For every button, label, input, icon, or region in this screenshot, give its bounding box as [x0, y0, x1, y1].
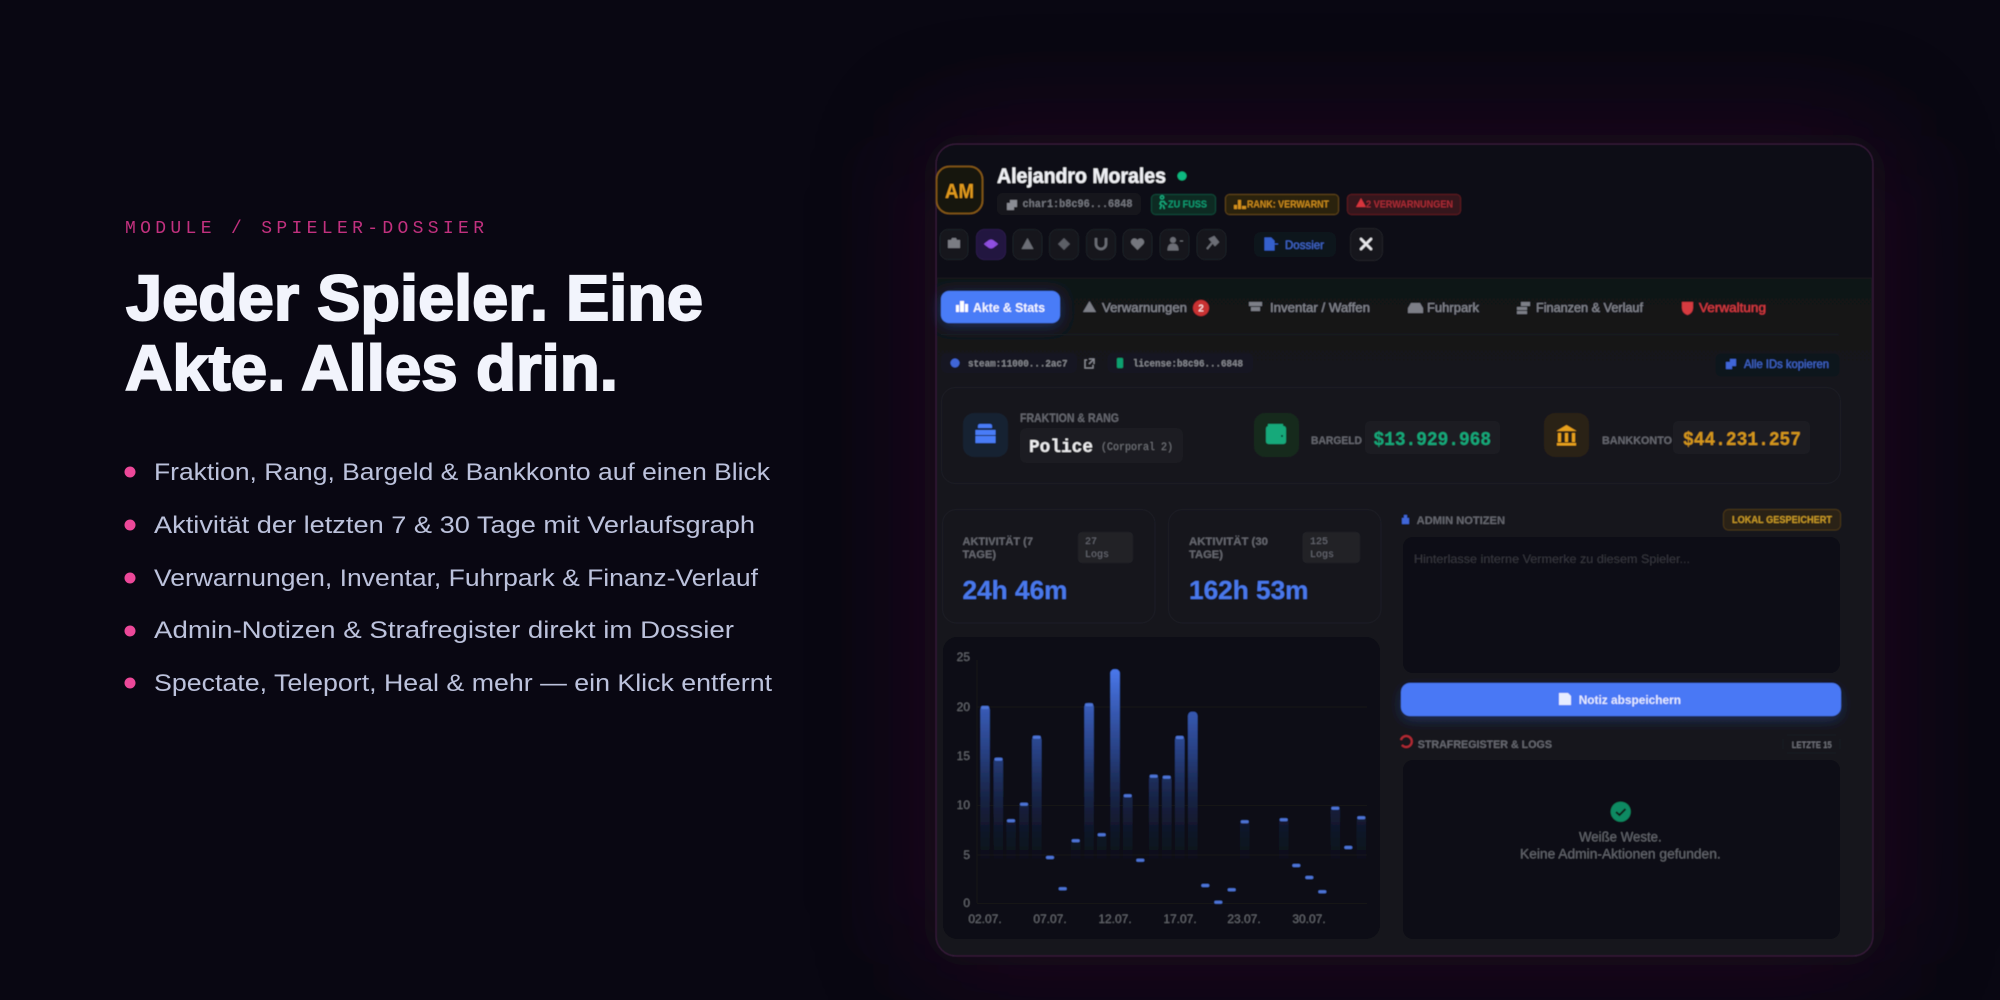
- steam id pill: steam:11000...2ac7: [968, 360, 1068, 370]
- y axis labels: 25: [957, 650, 970, 664]
- bank account: $44.231.257: [1683, 429, 1801, 451]
- activity card 30 days: TAGE): [1189, 549, 1223, 561]
- panel glow: [925, 135, 1885, 965]
- penalty log heading: [1401, 736, 1552, 751]
- x axis labels: 23.07.: [1227, 912, 1261, 926]
- bars: [980, 669, 1366, 903]
- activity card 30 days: Logs: [1310, 550, 1334, 561]
- y axis labels: 10: [957, 798, 970, 812]
- bar caps: [981, 703, 1365, 904]
- activity card 30 days: AKTIVITÄT (30: [1189, 535, 1268, 548]
- last 15 badge: LETZTE 15: [1792, 740, 1832, 750]
- penalty log heading: STRAFREGISTER & LOGS: [1418, 739, 1552, 751]
- tab: verwarnungen: Verwarnungen: [1102, 300, 1187, 315]
- bullet 4: Admin-Notizen & Strafregister direkt im Dossier: [154, 617, 734, 644]
- bullet 3: Verwarnungen, Inventar, Fuhrpark & Finanz-Verlauf: [154, 565, 758, 592]
- copy all ids button: [1715, 353, 1840, 377]
- y axis labels: 20: [957, 700, 970, 714]
- admin notes heading: ADMIN NOTIZEN: [1417, 515, 1505, 527]
- cash: [1311, 421, 1500, 454]
- tab: akte und stats (active): [941, 291, 1060, 325]
- icon: bank: [1544, 413, 1589, 457]
- badge: rank: [1226, 194, 1338, 214]
- tab: akte und stats (active): Akte & Stats: [973, 300, 1045, 315]
- close button: [1350, 228, 1382, 260]
- badge: warnings: 2 VERWARNUNGEN: [1366, 198, 1453, 210]
- saved locally badge: [1724, 510, 1840, 530]
- tab: verwarnungen: [1083, 300, 1209, 316]
- tab: fuhrpark: Fuhrpark: [1427, 300, 1479, 315]
- character id pill: char1:b8c96...6848: [1022, 199, 1133, 211]
- icon: check: [1611, 802, 1631, 822]
- x axis labels: 02.07.: [968, 912, 1002, 926]
- bank account: [1602, 421, 1810, 454]
- avatar: [936, 166, 982, 214]
- saved locally badge: LOKAL GESPEICHERT: [1732, 515, 1832, 526]
- character id pill: [997, 193, 1141, 215]
- bank account: BANKKONTO: [1602, 435, 1672, 447]
- action toolbar: [940, 230, 1226, 260]
- dossier button: Dossier: [1285, 238, 1324, 252]
- cash: $13.929.968: [1374, 429, 1491, 451]
- activity card 7 days: 24h 46m: [962, 575, 1068, 605]
- title: [125, 262, 703, 404]
- license id pill: license:b8c96...6848: [1133, 358, 1243, 370]
- activity card 7 days: Logs: [1085, 550, 1109, 561]
- summary card: [942, 388, 1840, 484]
- activity card 7 days: TAGE): [962, 549, 996, 561]
- tab: inventar: Inventar / Waffen: [1270, 300, 1370, 315]
- bullet 2: Aktivität der letzten 7 & 30 Tage mit Verlaufsgraph: [154, 512, 755, 539]
- notes textarea: Hinterlasse interne Vermerke zu diesem Spieler...: [1414, 552, 1690, 566]
- activity card 30 days: [1168, 510, 1381, 623]
- activity card 7 days: [942, 510, 1155, 623]
- activity card 7 days: AKTIVITÄT (7: [962, 535, 1033, 548]
- y axis labels: [957, 650, 970, 910]
- eyebrow: MODULE / SPIELER-DOSSIER: [125, 219, 484, 239]
- x axis labels: 07.07.: [1033, 912, 1067, 926]
- copy all ids button: Alle IDs kopieren: [1744, 357, 1829, 371]
- online dot: [1178, 172, 1186, 180]
- badge: rank: RANK: VERWARNT: [1247, 198, 1329, 210]
- empty text: Weiße Weste.: [1579, 830, 1662, 845]
- activity card 30 days: 125: [1310, 537, 1328, 548]
- bar chart: [943, 637, 1380, 939]
- faction block: [1020, 413, 1183, 463]
- empty text: Keine Admin-Aktionen gefunden.: [1520, 846, 1721, 862]
- badge: zu fuss: ZU FUSS: [1168, 198, 1207, 210]
- tab: verwarnungen: 2: [1198, 304, 1204, 314]
- dossier button: [1254, 232, 1336, 257]
- save note button: Notiz abspeichern: [1579, 693, 1681, 707]
- panel: player dossier window: [936, 144, 1873, 956]
- activity card 30 days: 162h 53m: [1189, 575, 1308, 605]
- badge: warnings: [1348, 194, 1460, 214]
- faction block: Police: [1029, 438, 1093, 458]
- y axis labels: 0: [963, 896, 970, 910]
- title: Jeder Spieler. Eine: [126, 262, 703, 334]
- last 15 badge: [1783, 735, 1840, 753]
- x axis labels: 12.07.: [1098, 912, 1132, 926]
- y axis labels: 15: [957, 749, 970, 763]
- icon: wallet: [1254, 413, 1299, 457]
- log empty state: [1403, 760, 1840, 939]
- tab: finanzen: Finanzen & Verlauf: [1536, 300, 1643, 315]
- bullet 1: Fraktion, Rang, Bargeld & Bankkonto auf einen Blick: [154, 459, 771, 486]
- empty text: [1520, 830, 1721, 862]
- player name: Alejandro Morales: [997, 165, 1166, 188]
- x axis labels: [968, 912, 1326, 926]
- title: Akte. Alles drin.: [125, 332, 618, 404]
- faction block: FRAKTION & RANG: [1020, 413, 1119, 425]
- notes textarea: [1403, 537, 1840, 673]
- bullet 5: Spectate, Teleport, Heal & mehr — ein Klick entfernt: [154, 670, 772, 697]
- faction block: (Corporal 2): [1101, 442, 1173, 454]
- save note button: [1401, 683, 1841, 720]
- badge: zu fuss: [1152, 194, 1216, 214]
- license id pill: [1108, 353, 1253, 373]
- tab: verwaltung: Verwaltung: [1699, 300, 1766, 315]
- activity card 7 days: 27: [1085, 537, 1097, 548]
- avatar: AM: [945, 181, 974, 203]
- x axis labels: 17.07.: [1163, 912, 1197, 926]
- x axis labels: 30.07.: [1292, 912, 1326, 926]
- cash: BARGELD: [1311, 435, 1362, 447]
- feature list: [124, 459, 772, 697]
- external link icon: [1085, 359, 1094, 368]
- y axis labels: 5: [963, 848, 970, 862]
- steam id pill: [941, 353, 1077, 373]
- icon: briefcase: [963, 413, 1008, 457]
